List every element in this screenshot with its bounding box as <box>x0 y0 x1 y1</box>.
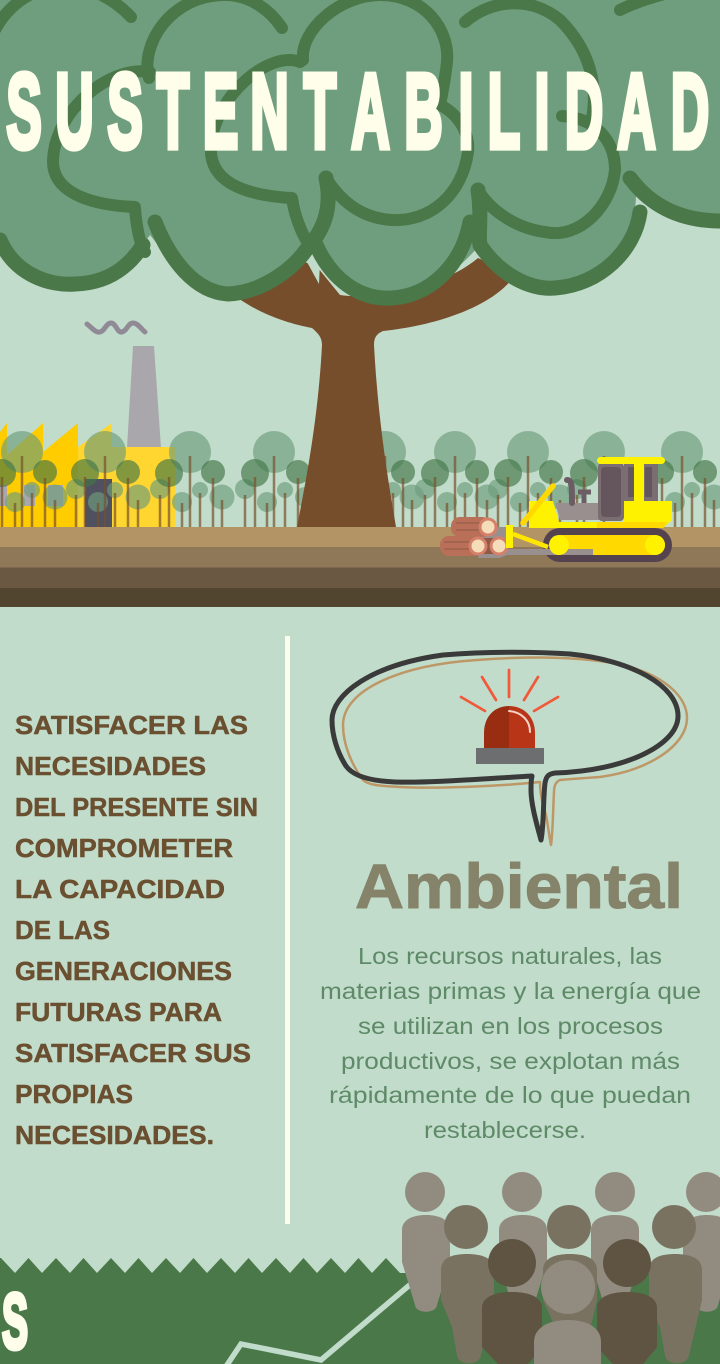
bubble outline dark <box>332 652 678 840</box>
environmental paragraph: productivos, se explotan más <box>341 1048 680 1074</box>
environmental paragraph: se utilizan en los procesos <box>358 1013 663 1039</box>
definition text <box>15 712 258 1150</box>
siren <box>461 670 558 764</box>
definition text: NECESIDADES <box>15 753 206 781</box>
front row <box>482 1239 657 1364</box>
bulldozer with logs <box>440 457 672 562</box>
tree canopy <box>0 0 720 298</box>
environmental paragraph: Los recursos naturales, las <box>358 943 662 969</box>
environmental paragraph: materias primas y la energía que <box>320 978 701 1004</box>
definition text: SATISFACER LAS <box>15 712 248 740</box>
bubble outline tan <box>343 658 687 845</box>
definition text: PROPIAS <box>15 1081 133 1109</box>
definition text: FUTURAS PARA <box>15 999 222 1027</box>
heading: Ambiental: Ambiental <box>355 852 683 922</box>
definition text: DEL PRESENTE SIN <box>15 794 258 822</box>
factory <box>0 323 175 527</box>
definition text: GENERACIONES <box>15 958 232 986</box>
environmental paragraph: rápidamente de lo que puedan <box>329 1082 691 1108</box>
definition text: COMPROMETER <box>15 835 233 863</box>
center person <box>534 1260 601 1364</box>
definition text: DE LAS <box>15 917 110 945</box>
definition text: LA CAPACIDAD <box>15 876 225 904</box>
speech bubble with siren <box>332 652 687 845</box>
crowd of people <box>402 1172 720 1364</box>
vertical divider <box>285 636 290 1224</box>
forest trees <box>0 431 720 527</box>
back row <box>402 1172 720 1312</box>
green zigzag ground <box>0 1258 720 1364</box>
chart line <box>225 1283 412 1364</box>
middle row <box>441 1205 702 1363</box>
environmental paragraph <box>320 943 701 1143</box>
bottom letter S: S <box>2 1278 28 1364</box>
ground layers <box>0 527 720 607</box>
environmental paragraph: restablecerse. <box>424 1117 586 1143</box>
logs <box>440 517 508 556</box>
definition text: SATISFACER SUS <box>15 1040 251 1068</box>
title: SUSTENTABILIDAD: SUSTENTABILIDAD <box>6 51 709 170</box>
definition text: NECESIDADES. <box>15 1122 214 1150</box>
tree trunk <box>238 255 515 527</box>
